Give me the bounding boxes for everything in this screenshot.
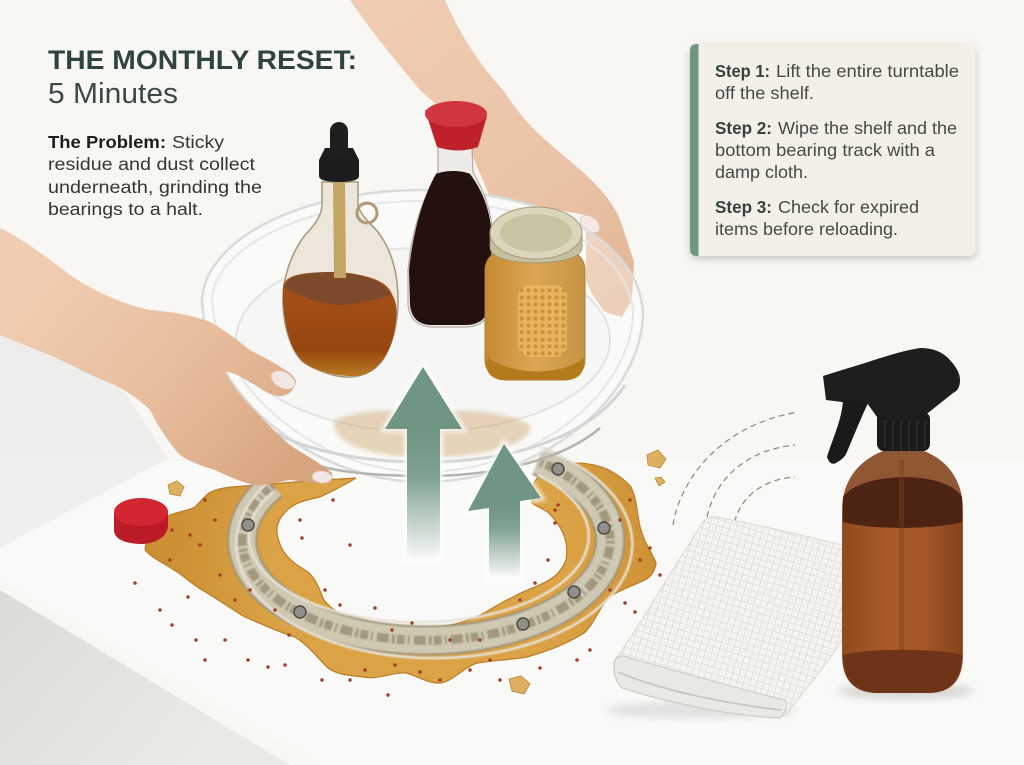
step 2 text: Wipe the shelf and the bbox=[778, 118, 957, 138]
step 2 text bbox=[715, 118, 957, 182]
honey jar bbox=[485, 207, 585, 380]
step 3 text bbox=[715, 197, 919, 239]
arrow: small lift arrow bbox=[468, 444, 541, 578]
step 1 text bbox=[715, 61, 959, 103]
step 3 text: Check for expired bbox=[778, 197, 919, 217]
soy sauce bottle bbox=[408, 101, 493, 327]
step 3 text: Step 3: bbox=[715, 197, 772, 217]
step 2 text: damp cloth. bbox=[715, 162, 808, 182]
icon: fingernail right hand bbox=[577, 212, 603, 236]
folded waffle towel bbox=[605, 517, 842, 718]
step 3 text: items before reloading. bbox=[715, 219, 898, 239]
icon: fingernails left hand bbox=[268, 367, 332, 484]
step 2 text: bottom bearing track with a bbox=[715, 140, 935, 160]
turntable glass bbox=[202, 190, 643, 482]
icon: red bottle cap bbox=[114, 498, 168, 544]
text block: the problem: underneath, grinding the bbox=[48, 177, 262, 197]
left arm and hand bbox=[0, 228, 332, 485]
text block: the problem: residue and dust collect bbox=[48, 154, 255, 174]
dashed motion lines bbox=[673, 412, 798, 532]
step 1 text: Step 1: bbox=[715, 61, 770, 81]
step 2 text: Step 2: bbox=[715, 118, 772, 138]
maple syrup bottle bbox=[283, 122, 398, 377]
step 1 text: off the shelf. bbox=[715, 83, 814, 103]
right arm and hand bbox=[350, 0, 634, 317]
panel: steps bbox=[690, 44, 976, 256]
heading: title bbox=[48, 45, 357, 110]
text block: the problem: The Problem: bbox=[48, 132, 166, 152]
heading: title: 5 Minutes bbox=[48, 78, 178, 110]
towel fold bbox=[614, 656, 787, 718]
text block: the problem: bearings to a halt. bbox=[48, 199, 203, 219]
heading: title: THE MONTHLY RESET: bbox=[48, 45, 357, 75]
spilled spice flakes and crumbs bbox=[135, 450, 666, 695]
arrow: large lift arrow bbox=[385, 367, 462, 560]
text block: the problem: Sticky bbox=[172, 132, 224, 152]
spill: sticky syrup ring bbox=[145, 463, 656, 683]
amber spray bottle bbox=[823, 348, 973, 699]
steel bearings bbox=[242, 463, 610, 630]
bearing ring with grime bbox=[236, 447, 632, 658]
text block: the problem bbox=[48, 132, 262, 219]
step 1 text: Lift the entire turntable bbox=[776, 61, 959, 81]
